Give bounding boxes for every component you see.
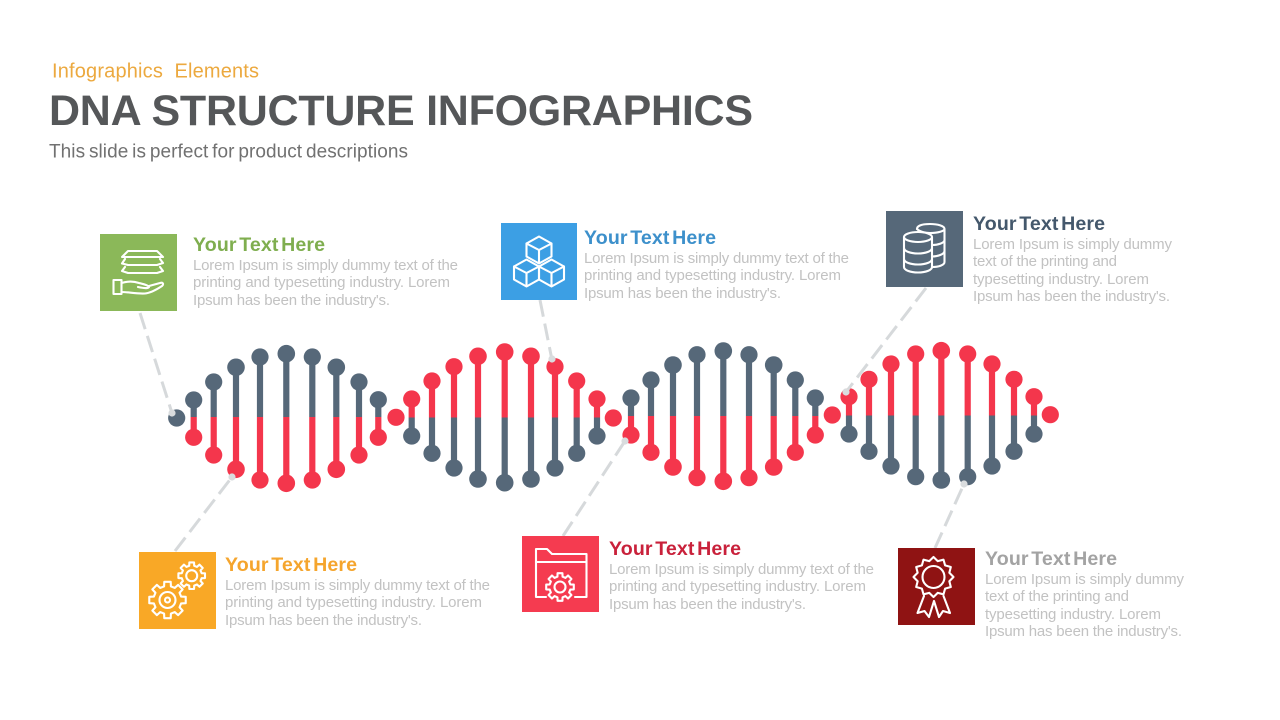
- panel: dark red card: [898, 548, 1184, 640]
- body text: Lorem Ipsum is simply dummy: [985, 571, 1184, 588]
- body text: Lorem Ipsum is simply dummy text of the: [584, 250, 849, 267]
- connector: card 5 to helix: [563, 437, 629, 536]
- helix turn 1: [168, 345, 405, 492]
- connector: card 6 to helix: [935, 480, 968, 548]
- icon: award ribbon: [898, 548, 975, 625]
- body text: Lorem Ipsum is simply dummy text of the: [225, 577, 490, 594]
- body text: Lorem Ipsum is simply dummy text of the: [609, 561, 874, 578]
- body text: Lorem Ipsum is simply dummy text of the: [193, 257, 458, 274]
- heading: Your Text Here: [584, 227, 716, 249]
- body text: Ipsum has been the industry's.: [973, 288, 1170, 305]
- body text: Lorem Ipsum is simply dummy: [973, 236, 1172, 253]
- helix turn 3: [622, 342, 841, 490]
- heading: Your Text Here: [973, 213, 1105, 235]
- panel: orange card: [139, 552, 490, 629]
- helix turn 4: [840, 342, 1059, 489]
- heading: Your Text Here: [609, 538, 741, 560]
- body text: typesetting industry. Lorem: [973, 271, 1149, 288]
- icon: cubes: [501, 223, 577, 300]
- body text: text of the printing and: [973, 253, 1117, 270]
- body text: printing and typesetting industry. Lorem: [609, 578, 866, 595]
- body text: Ipsum has been the industry's.: [609, 596, 806, 613]
- panel: slate card: [886, 211, 1172, 305]
- panel: red card: [522, 536, 874, 613]
- connector: card 3 to helix: [842, 288, 926, 396]
- icon: folder with gear: [522, 536, 599, 612]
- icon: database: [886, 211, 963, 287]
- helix turn 2: [403, 343, 622, 492]
- body text: typesetting industry. Lorem: [985, 606, 1161, 623]
- body text: printing and typesetting industry. Lorem: [193, 274, 450, 291]
- body text: [973, 236, 1172, 305]
- body text: Ipsum has been the industry's.: [193, 292, 390, 309]
- body text: Ipsum has been the industry's.: [225, 612, 422, 629]
- DNA helix: [168, 342, 1059, 492]
- panel: blue card: [501, 223, 849, 302]
- icon: gears: [139, 552, 216, 629]
- title: DNA STRUCTURE INFOGRAPHICS: [49, 87, 753, 135]
- body text: printing and typesetting industry. Lorem: [225, 594, 482, 611]
- body text: Ipsum has been the industry's.: [985, 623, 1182, 640]
- body text: Ipsum has been the industry's.: [584, 285, 781, 302]
- body text: [193, 257, 458, 309]
- icon: hand holding layers: [100, 234, 177, 311]
- subtitle: This slide is perfect for product descriptions: [49, 142, 408, 162]
- body text: [584, 250, 849, 302]
- body text: [985, 571, 1184, 640]
- body text: [225, 577, 490, 629]
- body text: printing and typesetting industry. Lorem: [584, 267, 841, 284]
- body text: text of the printing and: [985, 588, 1129, 605]
- connector: card 4 to helix: [175, 473, 236, 551]
- body text: [609, 561, 874, 613]
- panel: green card: [100, 234, 458, 311]
- heading: Your Text Here: [985, 548, 1117, 570]
- heading: Your Text Here: [193, 234, 325, 256]
- connector: card 1 to helix: [140, 313, 176, 417]
- heading: Your Text Here: [225, 554, 357, 576]
- connector: card 2 to helix: [540, 300, 556, 363]
- eyebrow label: Infographics Elements: [52, 60, 259, 82]
